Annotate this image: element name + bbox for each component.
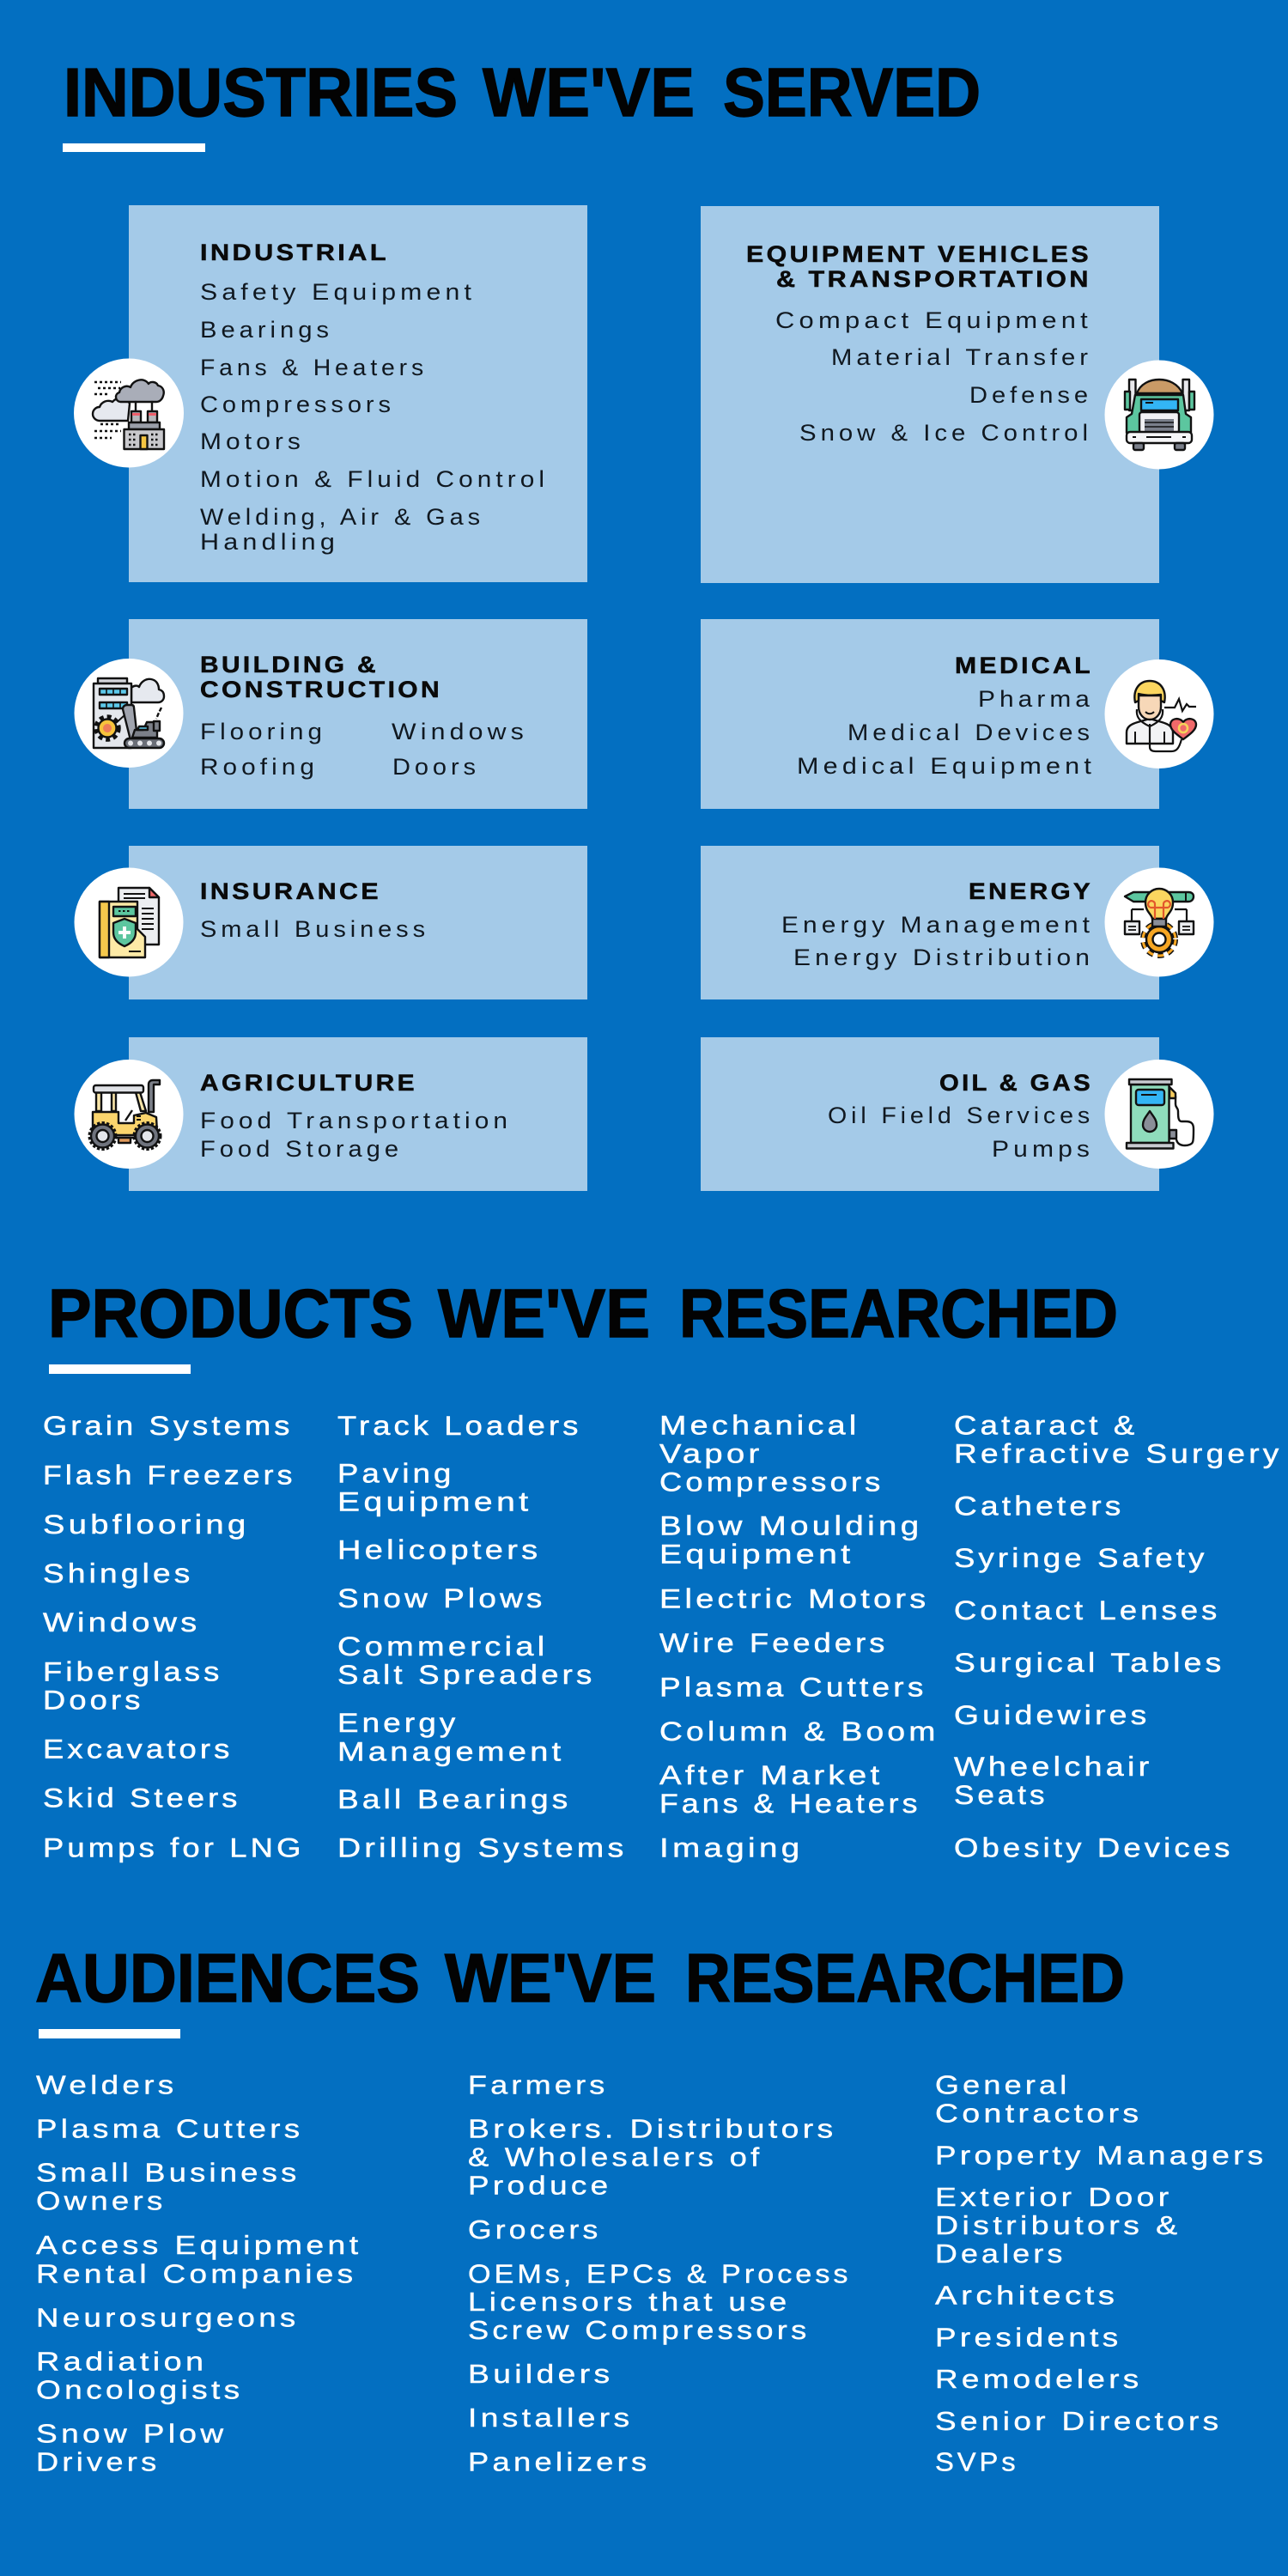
list: products column 4: Seats <box>954 1779 1048 1810</box>
list: energy items: Energy Distribution <box>793 945 1094 970</box>
list: audiences column 2: Screw Compressors <box>468 2316 811 2345</box>
list: audiences column 3: Contractors <box>935 2099 1142 2128</box>
list: products column 2: Equipment <box>337 1485 532 1516</box>
list: products column 2: Drilling Systems <box>337 1832 627 1863</box>
panel: medical <box>701 619 1214 809</box>
list: audiences column 2: Licensors that use <box>468 2287 790 2317</box>
list: audiences column 2: Brokers. Distributors <box>468 2114 836 2143</box>
list: medical items: Medical Equipment <box>797 753 1096 779</box>
list: products column 3: Fans & Heaters <box>659 1788 920 1819</box>
list: building items: Roofing <box>200 754 319 780</box>
list: audiences column 2: Farmers <box>468 2071 608 2100</box>
list: audiences column 3: General <box>935 2071 1070 2100</box>
list: products column 2: Commercial <box>337 1631 548 1662</box>
list: products column 1: Pumps for LNG <box>43 1832 304 1863</box>
panel: insurance <box>74 846 587 999</box>
list: industrial items: Fans & Heaters <box>200 355 428 380</box>
list: energy items <box>781 912 1094 970</box>
heading: building and construction: CONSTRUCTION <box>200 677 442 702</box>
list: equipment items: Material Transfer <box>831 344 1092 370</box>
list: audiences column 1: Snow Plow <box>36 2420 227 2449</box>
list: audiences column 3 <box>935 2071 1267 2476</box>
list: audiences column 1: Small Business <box>36 2159 301 2188</box>
list: products column 3: Vapor <box>659 1437 762 1468</box>
title: audiences: WE'VE <box>445 1940 656 2016</box>
list: insurance items: Small Business <box>200 916 429 942</box>
list: audiences column 2 <box>468 2071 852 2476</box>
list: products column 1: Flash Freezers <box>43 1460 295 1491</box>
list: oil and gas items: Pumps <box>992 1136 1094 1162</box>
list: products column 1: Shingles <box>43 1558 194 1589</box>
list: industrial items: Compressors <box>200 392 395 417</box>
list: audiences column 2: Installers <box>468 2403 634 2433</box>
icon: factory <box>74 359 184 467</box>
list: industrial items <box>200 279 549 555</box>
list: audiences column 2: Panelizers <box>468 2447 651 2476</box>
title: industries: INDUSTRIES <box>64 54 458 131</box>
title: audiences <box>35 1940 1125 2016</box>
list: products column 2: Management <box>337 1736 565 1767</box>
heading: equipment vehicles: & TRANSPORTATION <box>776 266 1091 292</box>
list: products column 1: Excavators <box>43 1733 234 1764</box>
heading: building and construction <box>200 652 442 702</box>
list: products column 3: After Market <box>659 1759 883 1790</box>
list: equipment items: Compact Equipment <box>775 307 1092 333</box>
list: audiences column 3: Distributors & <box>935 2211 1182 2240</box>
title: industries: WE'VE <box>483 54 695 131</box>
list: products column 2: Salt Spreaders <box>337 1659 596 1690</box>
list: industrial items: Motors <box>200 428 305 454</box>
list: audiences column 2: Produce <box>468 2171 611 2200</box>
list: energy items: Energy Management <box>781 912 1094 938</box>
heading: industrial: INDUSTRIAL <box>200 240 389 265</box>
panel: agriculture <box>74 1037 587 1191</box>
heading: equipment vehicles <box>746 241 1091 292</box>
list: medical items: Pharma <box>978 686 1094 712</box>
title: products <box>48 1275 1118 1352</box>
list: agriculture items: Food Transportation <box>200 1108 512 1133</box>
list: industrial items: Motion & Fluid Control <box>200 466 549 492</box>
list: audiences column 1: Access Equipment <box>36 2231 362 2260</box>
icon: tractor <box>74 1060 184 1169</box>
list: products column 3: Wire Feeders <box>659 1627 888 1658</box>
list: products column 4: Catheters <box>954 1491 1125 1522</box>
list: products column 4: Syringe Safety <box>954 1542 1207 1573</box>
list: audiences column 1: Owners <box>36 2186 167 2215</box>
list: products column 4: Refractive Surgery <box>954 1437 1283 1468</box>
icon: fuel pump <box>1104 1060 1214 1169</box>
list: industrial items: Handling <box>200 529 339 555</box>
list: audiences column 2: OEMs, EPCs & Process <box>468 2260 852 2289</box>
list: audiences column 3: SVPs <box>935 2447 1018 2476</box>
title: industries: SERVED <box>723 54 981 131</box>
list: audiences column 3: Presidents <box>935 2324 1121 2353</box>
list: products column 1: Doors <box>43 1685 144 1716</box>
list: industrial items: Welding, Air & Gas <box>200 504 484 530</box>
list: audiences column 1: Rental Companies <box>36 2260 357 2289</box>
heading: building and construction: BUILDING & <box>200 652 379 677</box>
list: products column 4: Guidewires <box>954 1699 1151 1730</box>
list: audiences column 3: Remodelers <box>935 2365 1142 2394</box>
panel: equipment vehicles and transportation <box>701 206 1214 583</box>
icon: construction <box>74 659 184 768</box>
heading: insurance: INSURANCE <box>200 878 381 904</box>
list: audiences column 3: Senior Directors <box>935 2407 1223 2436</box>
list: products column 2 <box>337 1410 627 1863</box>
list: products column 4: Contact Lenses <box>954 1595 1221 1625</box>
list: products column 4: Wheelchair <box>954 1751 1152 1782</box>
list: audiences column 2: Builders <box>468 2360 613 2389</box>
list: products column 1: Subflooring <box>43 1509 249 1540</box>
list: building items: Flooring <box>200 719 326 744</box>
list: medical items: Medical Devices <box>848 720 1094 745</box>
title: products: RESEARCHED <box>679 1275 1118 1352</box>
list: products column 3: Plasma Cutters <box>659 1671 927 1702</box>
list: products column 3: Blow Moulding <box>659 1510 922 1540</box>
list: audiences column 2: & Wholesalers of <box>468 2143 762 2172</box>
list: products column 1: Grain Systems <box>43 1410 294 1441</box>
heading: oil and gas: OIL & GAS <box>939 1070 1093 1096</box>
list: products column 3 <box>659 1410 939 1863</box>
list: industrial items: Bearings <box>200 317 333 343</box>
list: products column 2: Energy <box>337 1707 459 1738</box>
list: audiences column 1: Neurosurgeons <box>36 2303 299 2332</box>
list: oil and gas items: Oil Field Services <box>828 1103 1094 1128</box>
heading: equipment vehicles: EQUIPMENT VEHICLES <box>746 241 1091 267</box>
heading: medical: MEDICAL <box>955 653 1093 678</box>
list: products column 1 <box>43 1410 304 1863</box>
list: audiences column 1 <box>36 2071 362 2476</box>
title: products: WE'VE <box>438 1275 650 1352</box>
heading: agriculture: AGRICULTURE <box>200 1070 417 1096</box>
list: products column 4: Cataract & <box>954 1410 1139 1441</box>
list: audiences column 1: Oncologists <box>36 2375 244 2404</box>
icon: bulb and gear <box>1104 867 1214 977</box>
list: products column 4: Surgical Tables <box>954 1647 1224 1678</box>
list: agriculture items <box>200 1108 512 1162</box>
list: products column 3: Column & Boom <box>659 1716 939 1747</box>
list: equipment items: Defense <box>969 382 1092 408</box>
list: medical items <box>797 686 1096 779</box>
list: products column 2: Track Loaders <box>337 1410 582 1441</box>
panel: building and construction <box>74 619 587 809</box>
list: building items: Windows <box>392 719 528 744</box>
list: industrial items: Safety Equipment <box>200 279 476 305</box>
icon: insurance document <box>74 867 184 977</box>
list: products column 1: Fiberglass <box>43 1656 223 1686</box>
list: products column 3: Electric Motors <box>659 1583 929 1614</box>
list: products column 3: Equipment <box>659 1539 854 1570</box>
list: products column 1: Windows <box>43 1607 201 1637</box>
panel: oil and gas <box>701 1037 1214 1191</box>
list: products column 2: Snow Plows <box>337 1583 546 1613</box>
list: audiences column 3: Architects <box>935 2281 1118 2310</box>
list: products column 3: Compressors <box>659 1467 884 1498</box>
title: products: PRODUCTS <box>48 1275 413 1352</box>
list: products column 2: Paving <box>337 1458 455 1489</box>
list: products column 2: Helicopters <box>337 1534 541 1564</box>
list: oil and gas items <box>828 1103 1094 1162</box>
heading: energy: ENERGY <box>969 878 1093 904</box>
list: products column 1: Skid Steers <box>43 1783 240 1814</box>
list: audiences column 3: Dealers <box>935 2239 1066 2269</box>
panel: industrial <box>74 205 587 582</box>
list: building items: Doors <box>392 754 480 780</box>
list: equipment items <box>775 307 1092 446</box>
list: audiences column 1: Plasma Cutters <box>36 2114 304 2143</box>
list: audiences column 3: Property Managers <box>935 2142 1267 2171</box>
list: products column 2: Ball Bearings <box>337 1783 572 1814</box>
list: agriculture items: Food Storage <box>200 1136 403 1162</box>
list: audiences column 3: Exterior Door <box>935 2183 1173 2212</box>
icon: truck <box>1104 361 1214 469</box>
list: building items <box>200 719 528 780</box>
list: audiences column 2: Grocers <box>468 2215 601 2245</box>
title: industries <box>64 54 981 131</box>
list: products column 4 <box>954 1410 1283 1863</box>
list: audiences column 1: Welders <box>36 2071 177 2100</box>
title: audiences: RESEARCHED <box>685 1940 1125 2016</box>
list: equipment items: Snow & Ice Control <box>799 420 1092 446</box>
list: products column 3: Mechanical <box>659 1410 860 1441</box>
panel: energy <box>701 846 1214 999</box>
list: products column 3: Imaging <box>659 1832 804 1863</box>
title: audiences: AUDIENCES <box>35 1940 420 2016</box>
icon: doctor <box>1104 659 1214 769</box>
list: audiences column 1: Drivers <box>36 2447 160 2476</box>
list: audiences column 1: Radiation <box>36 2348 208 2377</box>
list: products column 4: Obesity Devices <box>954 1832 1233 1863</box>
